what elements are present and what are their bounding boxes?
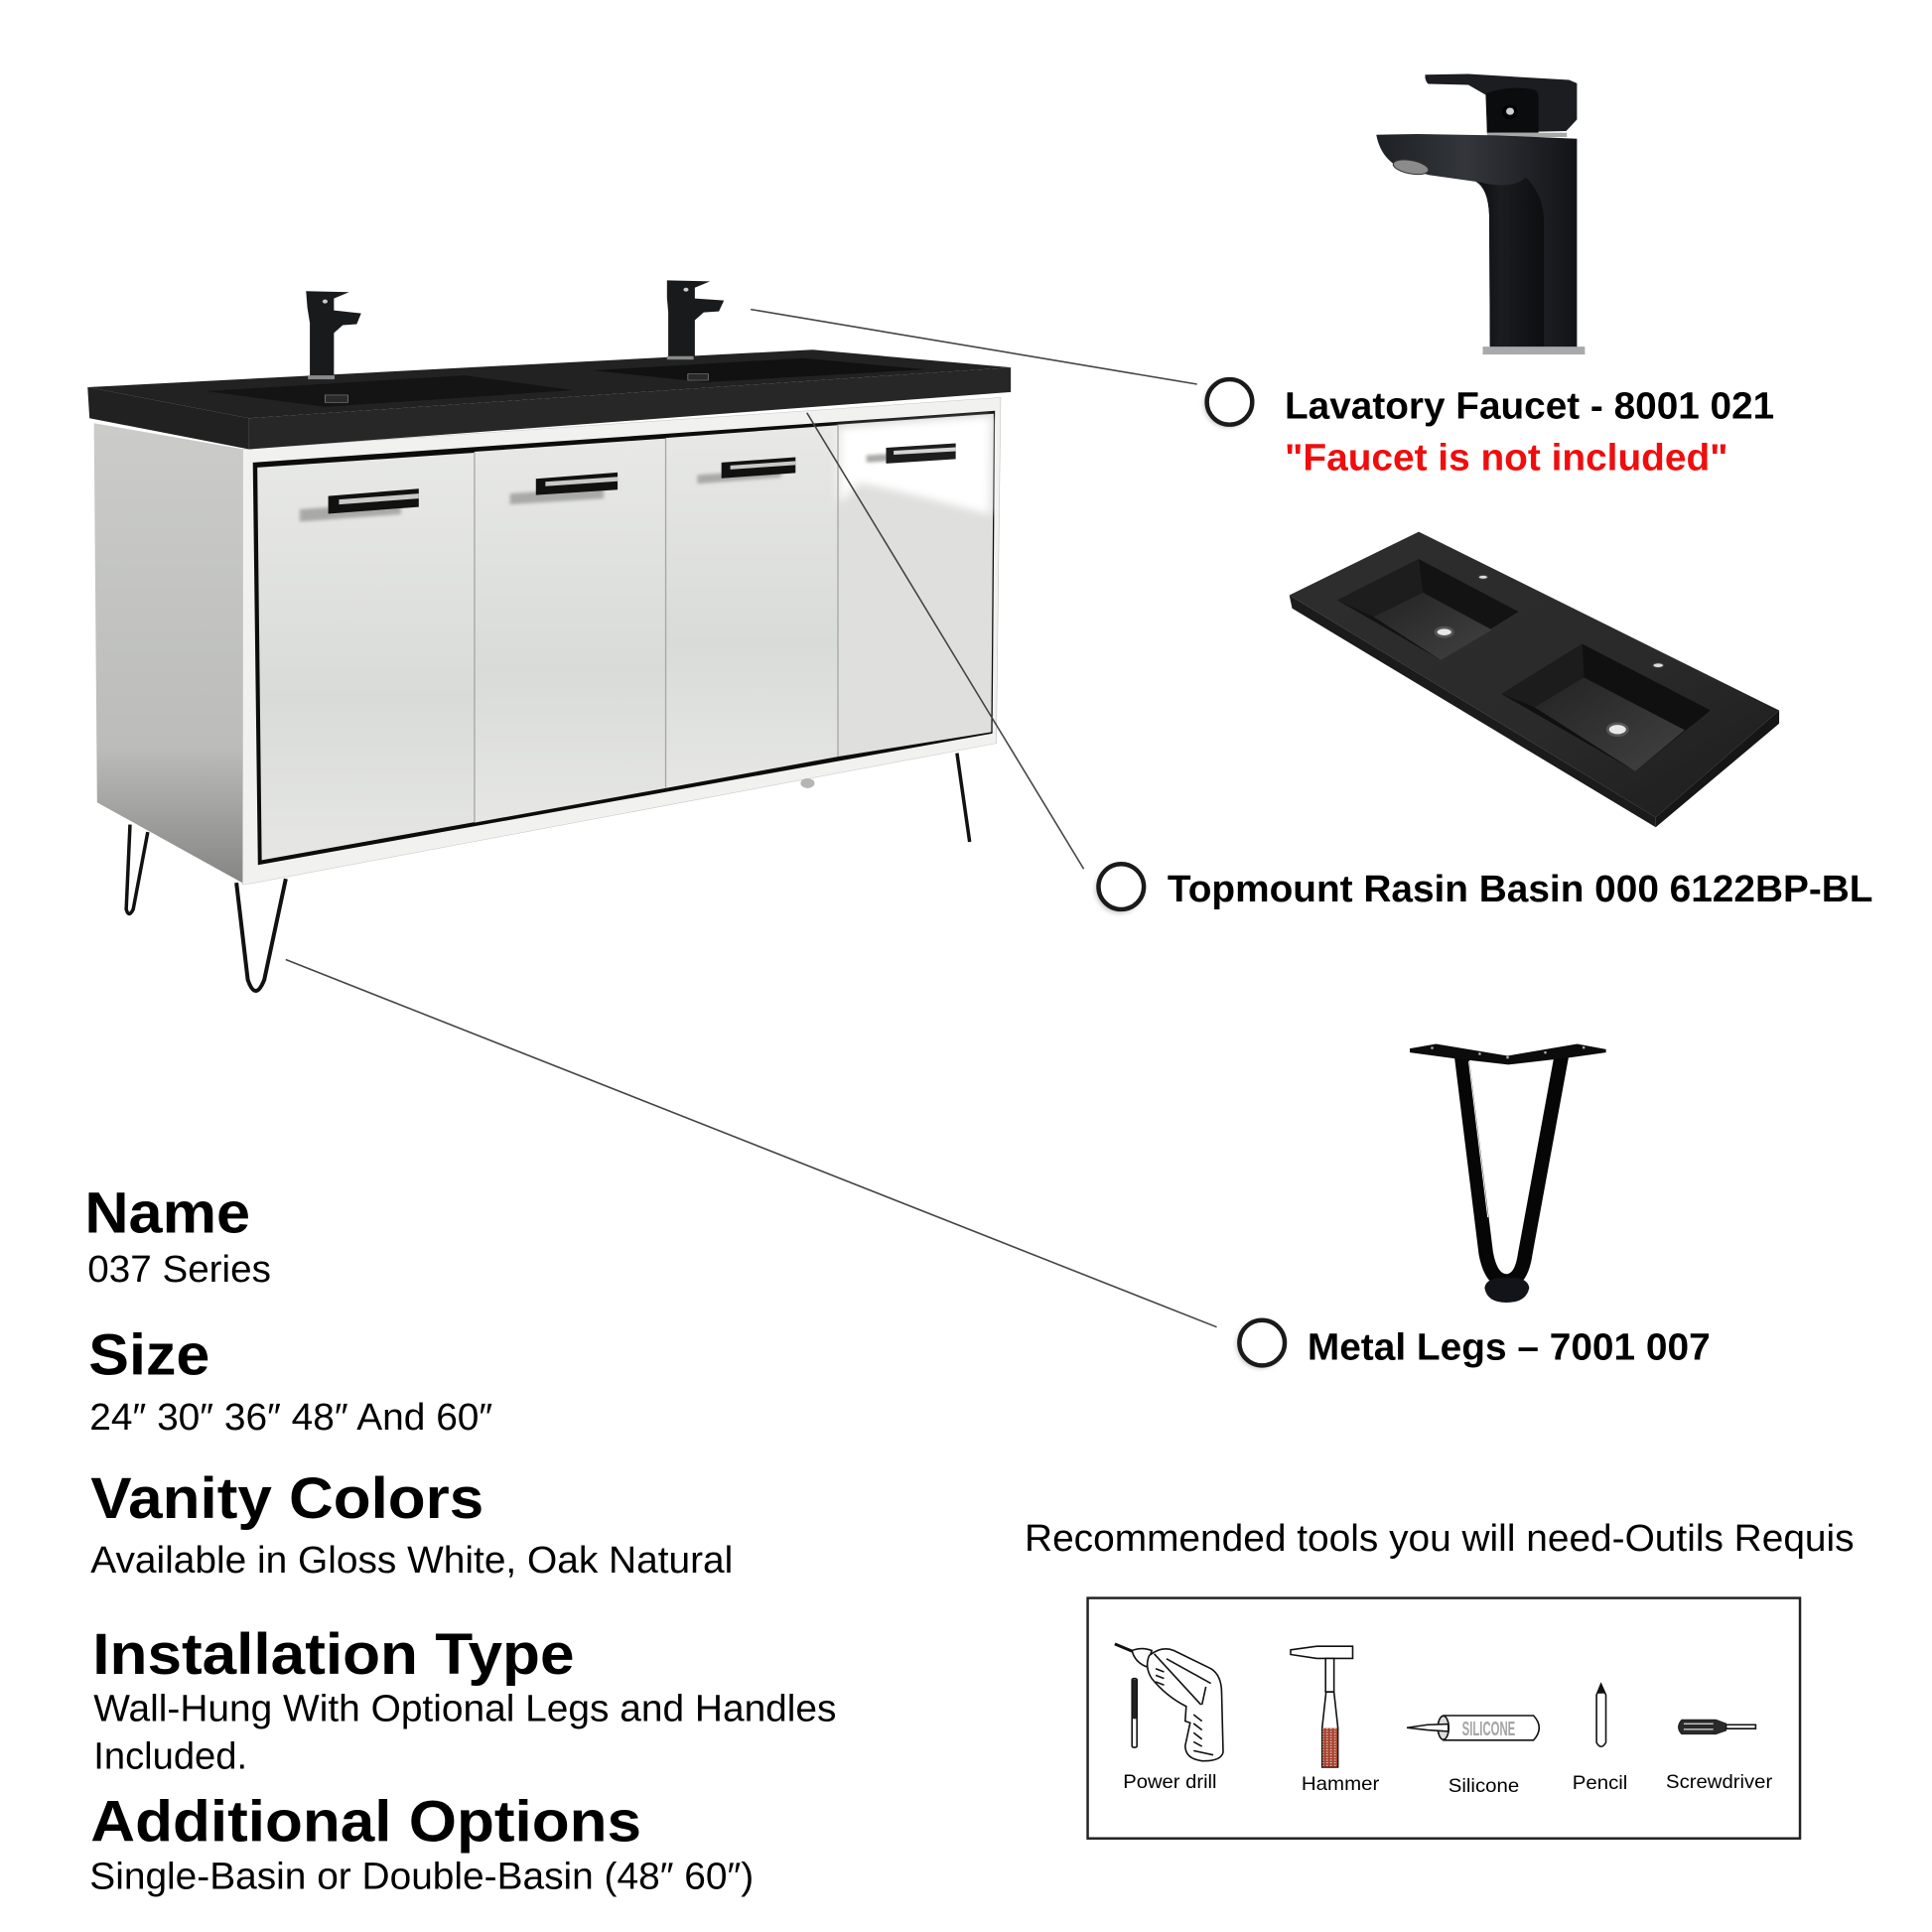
bowl right (1501, 644, 1711, 771)
callout marker: faucet (1204, 379, 1252, 428)
door gaps (475, 425, 838, 822)
countertop front edge (249, 367, 1011, 450)
screw (1502, 104, 1518, 119)
left specification text (84, 1180, 837, 1896)
basin right side (1656, 711, 1779, 827)
tools panel (1088, 1598, 1800, 1839)
callout marker: legs (1236, 1320, 1285, 1368)
faucet right (667, 280, 724, 359)
heading: vanity colors: Vanity Colors (90, 1466, 483, 1531)
heading: installation type: Installation Type (92, 1622, 575, 1687)
bowl left side wall (1337, 559, 1423, 617)
screw highlights (1506, 107, 1514, 115)
faucet left (306, 291, 361, 379)
door 2 (475, 439, 666, 823)
bowl right side wall (1501, 644, 1584, 707)
label: basin: Topmount Rasin Basin 000 6122BP-BL (1168, 868, 1872, 909)
faucet holes (1478, 575, 1664, 667)
tool icons (1115, 1644, 1755, 1767)
tool label: pencil: Pencil (1573, 1772, 1627, 1794)
tool label: screwdriver: Screwdriver (1666, 1771, 1773, 1793)
faucet spout and body (1376, 134, 1577, 347)
leg plate (1410, 1044, 1606, 1064)
overflow slots (325, 374, 708, 402)
tool label: silicone: Silicone (1449, 1775, 1519, 1797)
bowl right floor (1535, 677, 1685, 771)
handle 1 (329, 488, 419, 514)
drain pipe (800, 778, 814, 788)
faucet base (1482, 346, 1585, 354)
value: options: Single-Basin or Double-Basin (48″ 60″) (89, 1855, 754, 1896)
handle 2 (536, 473, 618, 495)
faucet lever cap (1486, 88, 1539, 133)
plate holes (1431, 1046, 1585, 1058)
tools heading: Recommended tools you will need-Outils Requis (1025, 1517, 1855, 1559)
value: installation line 1: Wall-Hung With Optional Legs and Handles (93, 1688, 837, 1729)
faucet lever (1425, 74, 1577, 133)
leg rods (1461, 1056, 1562, 1281)
handle 4 (886, 444, 956, 464)
icon: hammer (1291, 1646, 1352, 1767)
value: colors: Available in Gloss White, Oak Natural (90, 1539, 733, 1581)
basin photo (1290, 532, 1779, 827)
basin left (207, 375, 573, 407)
bowl left floor (1373, 593, 1492, 660)
heading: name: Name (84, 1180, 250, 1245)
icon: pencil (1596, 1684, 1606, 1746)
faucet stem front (1477, 178, 1544, 347)
icon: screwdriver (1678, 1720, 1755, 1734)
handle shadows (300, 451, 945, 521)
leader line to faucet (751, 310, 1197, 384)
back left hairpin leg (126, 825, 148, 913)
leg foot (1484, 1278, 1529, 1303)
metal leg photo (1410, 1044, 1606, 1303)
icon: silicone tube (1407, 1716, 1539, 1740)
faucet aerator (1392, 157, 1430, 177)
heading: size: Size (88, 1322, 209, 1387)
icon: power drill (1115, 1644, 1223, 1761)
tool label: hammer: Hammer (1302, 1773, 1380, 1795)
basin top face (1290, 532, 1779, 817)
countertop top face (87, 349, 1011, 418)
value: sizes: 24″ 30″ 36″ 48″ And 60″ (89, 1396, 492, 1438)
callout marker: basin (1095, 864, 1144, 913)
cabinet white front frame (242, 397, 1001, 885)
value: installation line 2: Included. (93, 1734, 247, 1776)
door 3 (666, 425, 838, 788)
door 4 (838, 414, 994, 757)
handle 3 (722, 457, 795, 479)
label: faucet: Lavatory Faucet - 8001 021 (1285, 385, 1774, 427)
cabinet side panel (94, 423, 244, 884)
label: faucet not included: "Faucet is not included" (1285, 436, 1728, 478)
basin right (593, 358, 925, 382)
leader line to legs (286, 960, 1217, 1327)
heading: additional options: Additional Options (90, 1790, 641, 1855)
tool label: power drill: Power drill (1123, 1771, 1217, 1793)
icon: silicone tube: SILICONE (1462, 1717, 1515, 1740)
door 1 (257, 453, 475, 860)
value: series: 037 Series (87, 1248, 271, 1290)
leg rod highlight (1469, 1061, 1488, 1217)
chrome ring (1487, 133, 1567, 137)
faucet photo (1376, 74, 1585, 354)
leader line to basin (807, 413, 1084, 869)
countertop left edge (87, 387, 249, 450)
back right leg (957, 754, 970, 842)
bowl left (1337, 559, 1519, 660)
basin left side (1290, 596, 1656, 827)
drains (1436, 627, 1627, 736)
black door recess (253, 411, 995, 865)
door 4 reflection (839, 417, 991, 514)
vanity cabinet illustration (87, 280, 1011, 991)
label: legs: Metal Legs – 7001 007 (1308, 1325, 1711, 1367)
front left hairpin leg (236, 879, 286, 991)
